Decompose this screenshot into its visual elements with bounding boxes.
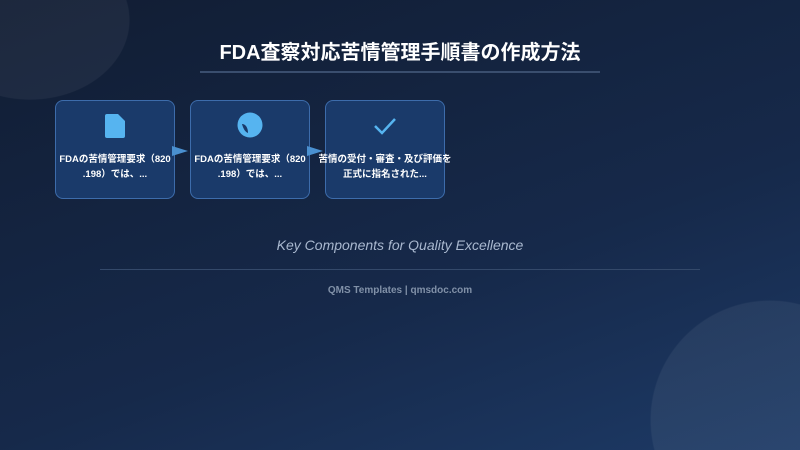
text 1: FDAの苦情管理要求（820 — [59, 154, 171, 165]
card 2 — [190, 100, 310, 199]
text 3 — [318, 154, 452, 180]
icon: globe — [238, 112, 262, 138]
card 3 — [325, 100, 445, 199]
text 2 — [194, 154, 306, 180]
text 1: .198）では、... — [83, 169, 147, 180]
subtitle: Key Components for Quality Excellence — [277, 237, 523, 253]
arrow 1 — [172, 146, 188, 156]
icon: check — [374, 118, 396, 135]
text 3: 苦情の受付・審査・及び評価を — [318, 154, 452, 165]
arrow 2 — [307, 146, 323, 156]
text 2: FDAの苦情管理要求（820 — [194, 154, 306, 165]
text 2: .198）では、... — [218, 169, 282, 180]
icon: document — [105, 114, 125, 138]
text 1 — [59, 154, 171, 180]
card 1 — [55, 100, 175, 199]
text 3: 正式に指名された... — [343, 169, 427, 180]
title: FDA査察対応苦情管理手順書の作成方法 — [219, 42, 581, 64]
footer: QMS Templates | qmsdoc.com — [328, 285, 472, 296]
